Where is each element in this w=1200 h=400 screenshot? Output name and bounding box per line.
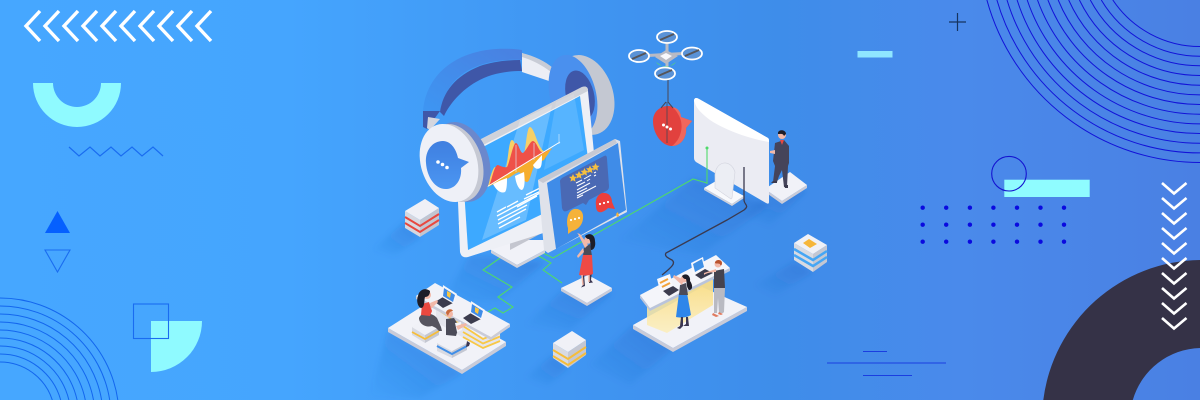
- blue data cube with envelope: [794, 234, 827, 272]
- yellow tablet marker: [616, 212, 619, 217]
- solid triangle: [45, 211, 70, 233]
- blue speech bubble: [426, 141, 469, 189]
- desk top: [640, 268, 730, 311]
- right ear cup: [541, 47, 624, 143]
- rear monitor: [662, 98, 769, 275]
- top-left white chevrons: [26, 11, 211, 41]
- desk pedestal with stripes: [436, 305, 500, 349]
- seated woman: [417, 289, 442, 331]
- left desk platform: [388, 283, 510, 374]
- drone arms: [639, 37, 692, 73]
- laptop one: [657, 274, 679, 296]
- bottom-right desk platform: [633, 255, 747, 352]
- outline square: [134, 304, 168, 338]
- main monitor: [456, 87, 600, 268]
- laptop two: [691, 257, 713, 279]
- bottom-left concentric arcs: [0, 298, 118, 400]
- desk top: [416, 296, 510, 340]
- review bubble: [560, 156, 609, 211]
- plus mark: [949, 13, 966, 31]
- green wire on rear monitor: [706, 148, 708, 184]
- outline triangle: [45, 250, 70, 272]
- drone: [629, 31, 702, 102]
- standing woman in blue dress: [673, 274, 692, 329]
- tablet screen: [547, 143, 626, 249]
- laptop two: [463, 301, 485, 324]
- woman on small platform: [561, 272, 612, 306]
- dark ring: [1043, 260, 1200, 400]
- man in suit: [770, 130, 789, 188]
- red speech bubble cargo: [653, 102, 692, 146]
- man's platform: [765, 172, 807, 204]
- drone body: [655, 50, 678, 64]
- green wire node: [706, 146, 708, 150]
- drone cable: [667, 80, 669, 102]
- yellow data cube: [553, 331, 586, 368]
- right white chevrons: [1162, 183, 1186, 328]
- cyan bar: [1004, 180, 1090, 197]
- cyan half ring: [33, 83, 121, 127]
- review text lines: [576, 172, 596, 198]
- rating stars: [569, 163, 600, 182]
- top-right concentric arcs: [987, 0, 1200, 162]
- monitor neck: [715, 163, 735, 199]
- standing woman in red skirt: [577, 233, 595, 285]
- seated man: [446, 309, 470, 347]
- dark power cable: [662, 167, 747, 275]
- ground shadows: [370, 178, 813, 398]
- monitor base: [704, 181, 744, 206]
- blue horizontal lines: [827, 352, 946, 376]
- monitor screen: [462, 96, 592, 250]
- stool one: [412, 318, 439, 343]
- headphone band: [423, 49, 553, 130]
- cyan quarter circle: [151, 321, 202, 372]
- small platform: [561, 275, 612, 306]
- small cyan bar: [858, 51, 892, 58]
- rotors: [629, 31, 702, 80]
- monitor base: [491, 218, 545, 268]
- outline circle: [992, 156, 1026, 191]
- dot grid: [920, 206, 1066, 244]
- yellow desk panel: [647, 270, 713, 333]
- monitor text lines: [497, 188, 543, 228]
- yellow speech bubble: [567, 209, 583, 234]
- area chart: [485, 127, 560, 193]
- stool two: [437, 333, 467, 358]
- tablet: [538, 139, 627, 253]
- green network wires: [483, 179, 707, 313]
- left ear cup: [410, 114, 500, 210]
- red data cube: [405, 199, 439, 237]
- zigzag line: [69, 147, 163, 156]
- laptop one: [435, 285, 457, 308]
- red speech bubble: [596, 193, 615, 212]
- standing man with vest: [704, 260, 725, 317]
- monitor highlight: [694, 98, 769, 142]
